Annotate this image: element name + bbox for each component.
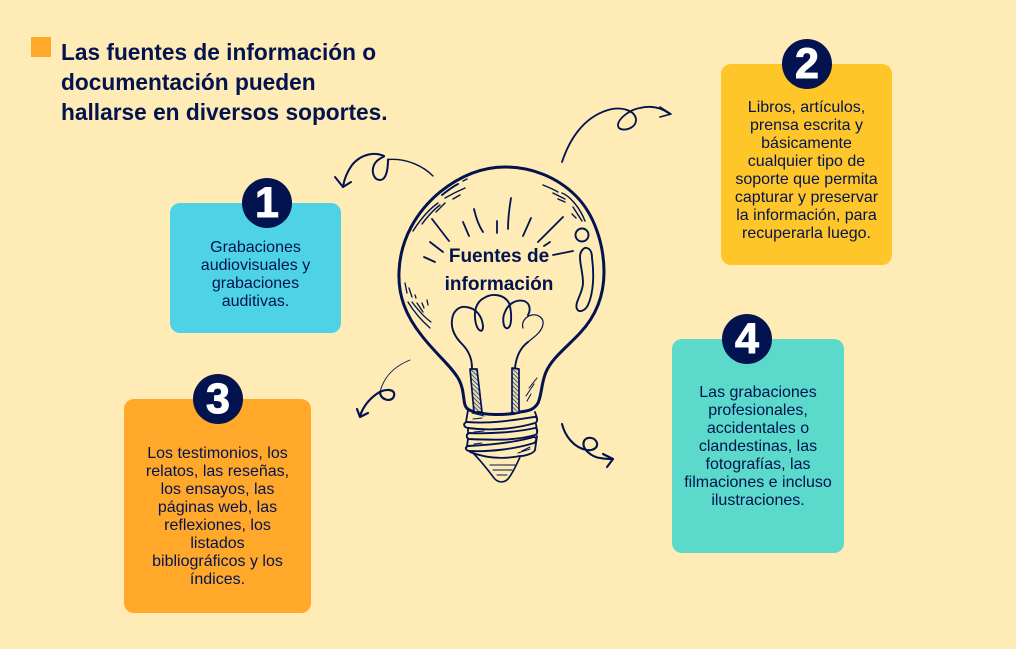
number 3: 3	[206, 375, 230, 423]
card 4 background	[672, 339, 844, 553]
card 4 text: filmaciones e incluso	[684, 474, 832, 491]
arrow to card 4	[562, 424, 613, 467]
card 2 text: básicamente	[761, 135, 852, 152]
card 2 text: soporte que permita	[735, 171, 878, 188]
bulb label: información	[445, 274, 553, 295]
lower left glass hatch	[405, 283, 431, 328]
card 3 text: índices.	[190, 571, 245, 588]
filament	[452, 295, 543, 368]
card 2 text: recuperarla luego.	[742, 225, 871, 242]
title: Las fuentes de información o	[61, 39, 376, 65]
card 3 background	[124, 399, 311, 613]
card 3 text: reflexiones, los	[164, 517, 271, 534]
arrow to card 2	[562, 107, 671, 162]
card 3 text	[146, 445, 289, 588]
title	[61, 39, 388, 125]
number 2: 2	[795, 40, 819, 88]
number 4: 4	[735, 315, 759, 363]
bulb label	[445, 246, 553, 295]
light rays	[424, 198, 573, 262]
card 4 text: accidentales o	[707, 420, 809, 437]
card 3 text: los ensayos, las	[161, 481, 274, 498]
number 1: 1	[255, 179, 279, 227]
bulb glass outline	[399, 167, 604, 415]
screw base	[464, 378, 537, 482]
glass highlight	[576, 228, 593, 311]
card 4 text: fotografías, las	[706, 456, 810, 473]
card 3 text: listados	[190, 535, 245, 552]
panel: card 1	[170, 178, 341, 333]
card 4 text: ilustraciones.	[711, 492, 805, 509]
number 4	[722, 314, 772, 364]
arrow to card 3	[357, 360, 410, 417]
card 1 text	[201, 239, 310, 310]
card 2 text	[735, 99, 878, 242]
card 4 text: clandestinas, las	[699, 438, 817, 455]
bulb label: Fuentes de	[449, 246, 549, 267]
card 3 text: Los testimonios, los	[147, 445, 288, 462]
card 2 text: cualquier tipo de	[748, 153, 865, 170]
card 2 text: prensa escrita y	[750, 117, 863, 134]
card 4 text	[684, 384, 832, 509]
number 1	[242, 178, 292, 228]
card 3 text: relatos, las reseñas,	[146, 463, 289, 480]
card 3 text: bibliográficos y los	[152, 553, 283, 570]
number 2	[782, 39, 832, 89]
filament supports	[470, 368, 519, 413]
arrow to card 1	[335, 154, 433, 187]
card 2 text: la información, para	[736, 207, 877, 224]
panel: card 3	[124, 374, 311, 613]
panel: card 2	[721, 39, 892, 265]
card 2 text: capturar y preservar	[735, 189, 878, 206]
title: documentación pueden	[61, 69, 316, 95]
card 2 text: Libros, artículos,	[748, 99, 865, 116]
card 1 text: grabaciones	[212, 275, 299, 292]
card 4 text: profesionales,	[708, 402, 808, 419]
card 1 background	[170, 203, 341, 333]
card 1 text: Grabaciones	[210, 239, 301, 256]
card 2 background	[721, 64, 892, 265]
card 4 text: Las grabaciones	[699, 384, 817, 401]
square bullet	[31, 37, 51, 57]
card 1 text: auditivas.	[222, 293, 289, 310]
card 3 text: páginas web, las	[158, 499, 277, 516]
card 1 text: audiovisuales y	[201, 257, 310, 274]
number 3	[193, 374, 243, 424]
title: hallarse en diversos soportes.	[61, 99, 388, 125]
panel: card 4	[672, 314, 844, 553]
